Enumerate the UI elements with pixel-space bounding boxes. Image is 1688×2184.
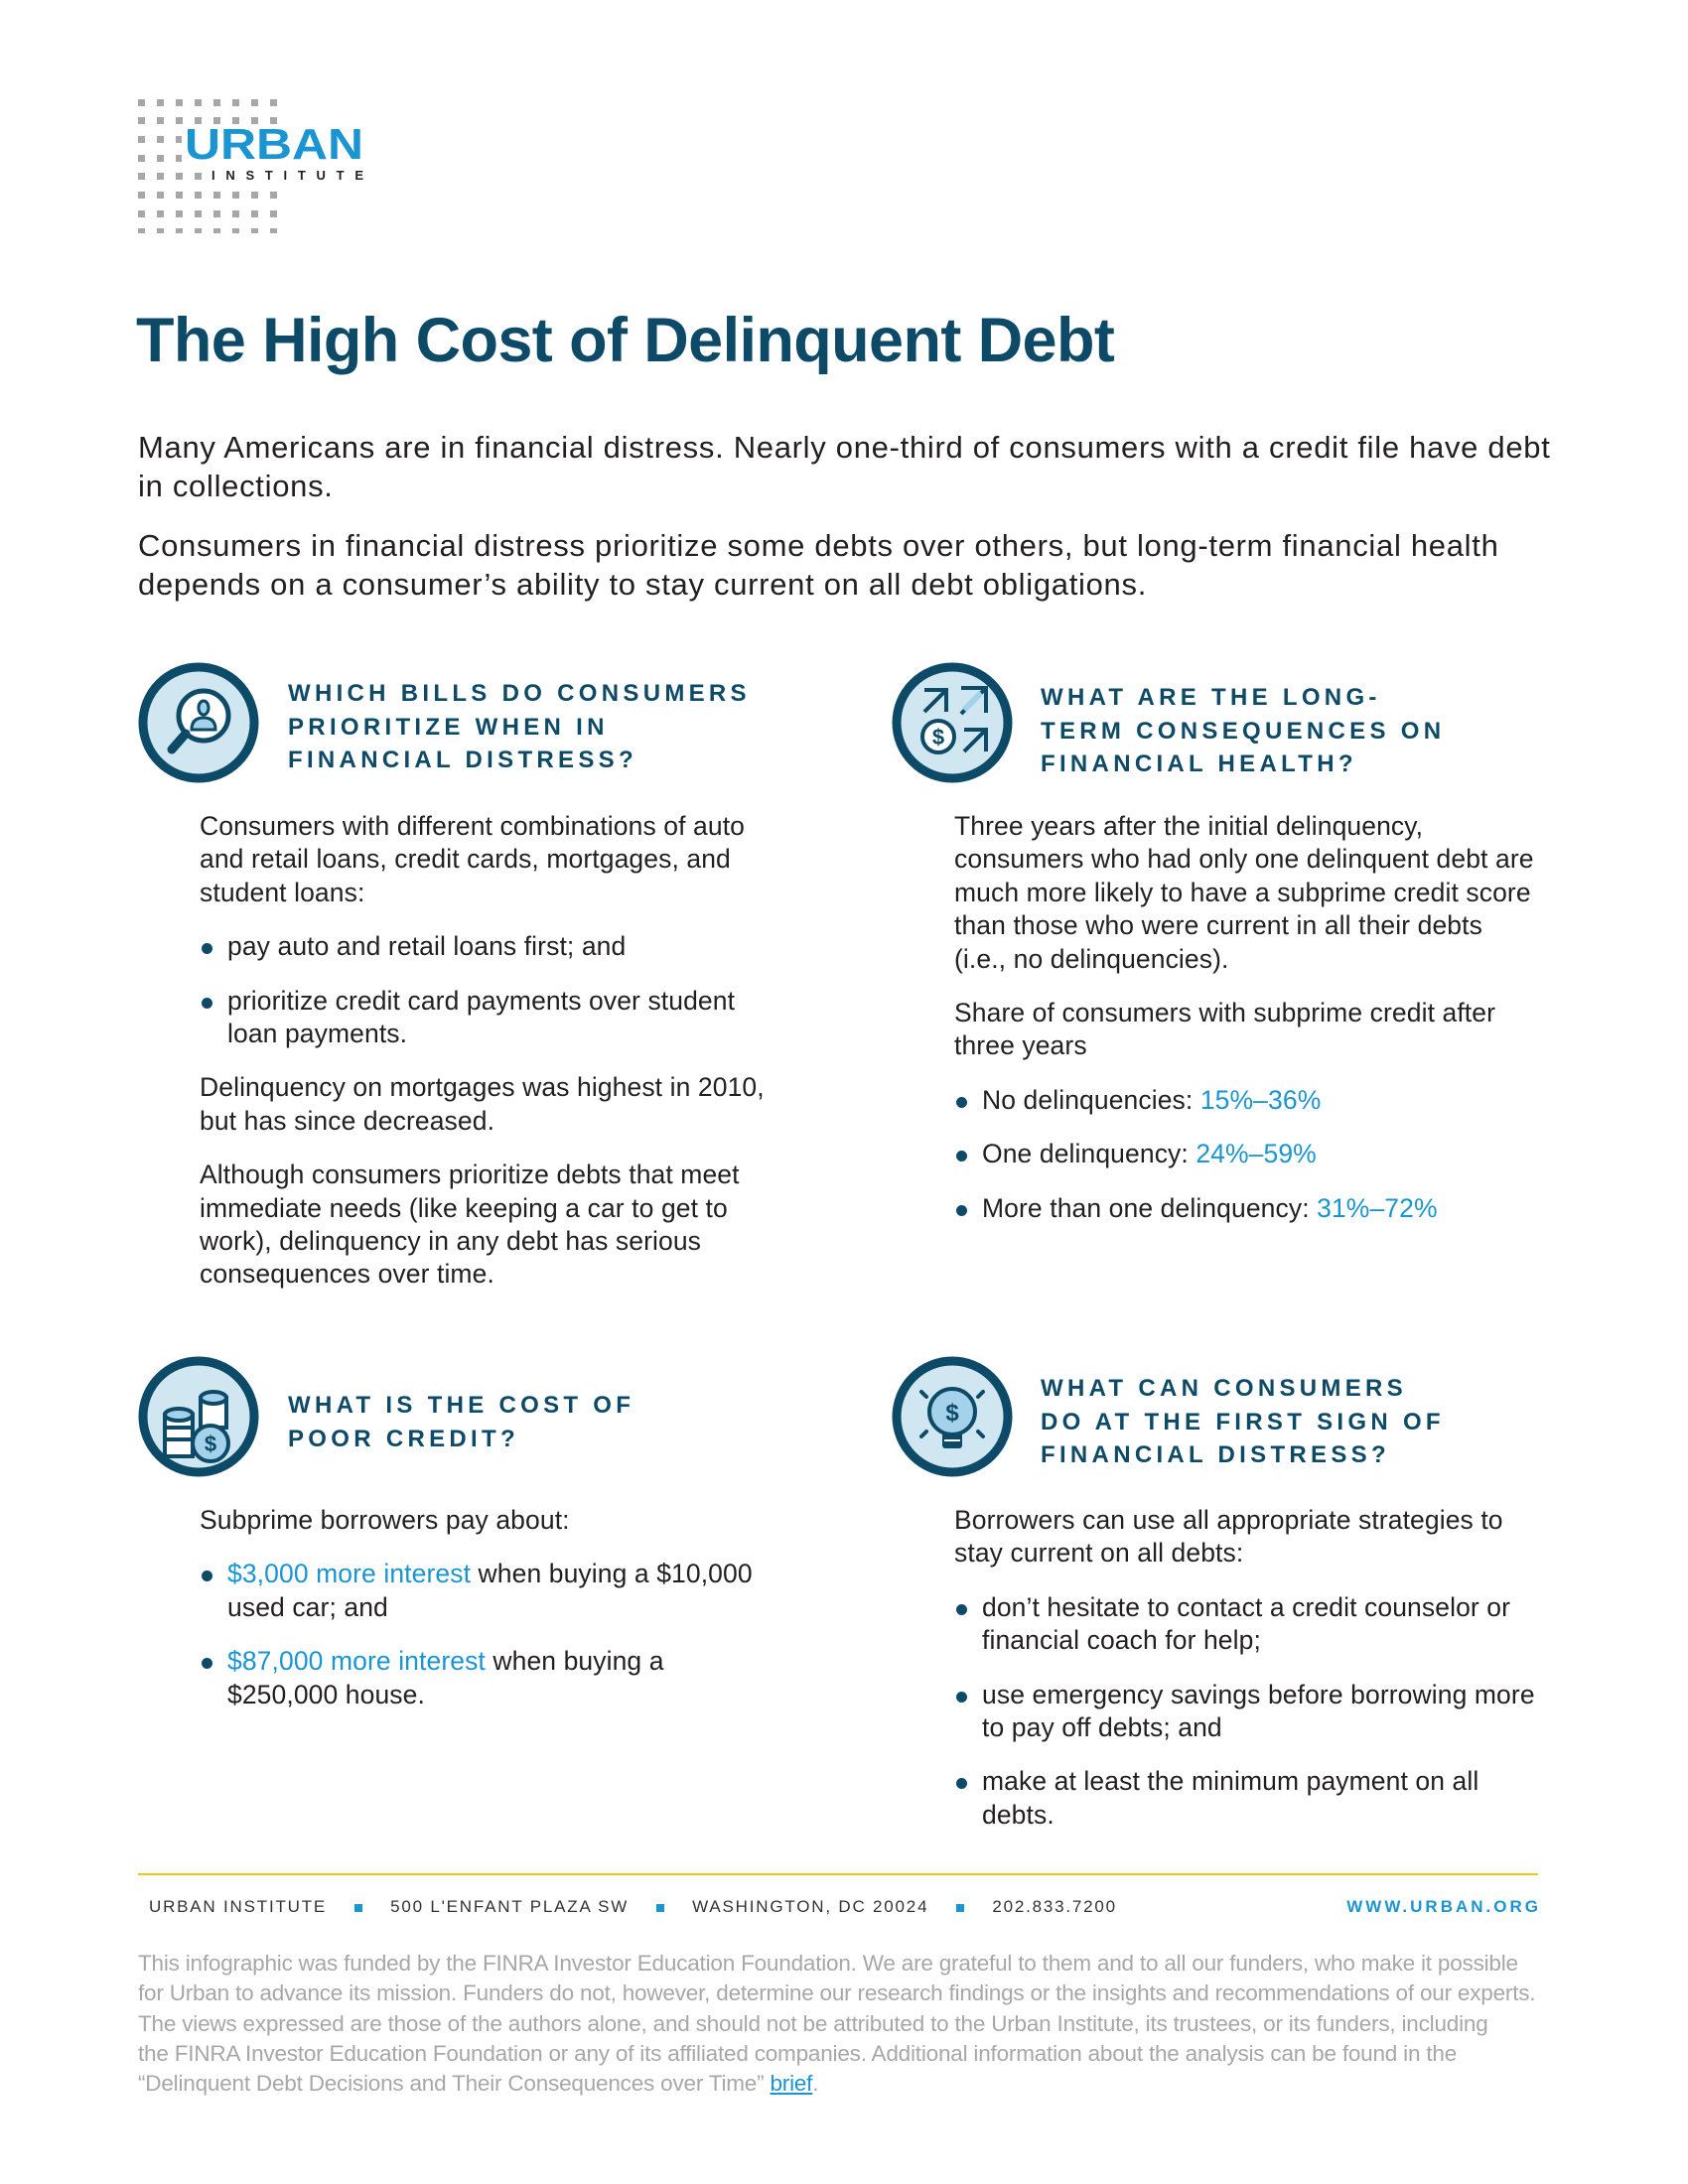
heading: long-term consequences: WHAT ARE THE LONG- <box>1041 684 1381 711</box>
text block: cost: used car; and <box>227 1592 388 1622</box>
heading: first sign of distress <box>1041 1375 1445 1468</box>
heading: cost of poor credit: POOR CREDIT? <box>288 1426 519 1451</box>
heading: first sign of distress: DO AT THE FIRST SIGN OF <box>1041 1408 1445 1435</box>
text block: cost: Subprime borrowers pay about: <box>200 1505 570 1535</box>
heading: long-term consequences: FINANCIAL HEALTH? <box>1041 751 1357 777</box>
heading: which bills: WHICH BILLS DO CONSUMERS <box>288 680 751 707</box>
intro text: in collections. Consumers in financial distress prioritize some debts over others, but long-term financial health <box>138 469 1499 563</box>
title: The High Cost of Delinquent Debt <box>136 306 1114 375</box>
icon: arrows dollar <box>892 663 1013 782</box>
text block: prioritize: consequences over time. <box>200 1259 494 1289</box>
heading: cost of poor credit: WHAT IS THE COST OF <box>288 1392 634 1419</box>
heading: which bills: PRIORITIZE WHEN IN <box>288 713 609 741</box>
heading: which bills <box>288 680 751 773</box>
text block: prioritize: immediate needs (like keeping a car to get to <box>200 1193 728 1223</box>
heading: which bills: FINANCIAL DISTRESS? <box>288 747 637 773</box>
disclaimer: for Urban to advance its mission. Funders do not, however, determine our research findings or the insights and recommendations of our experts. <box>138 1980 1535 2005</box>
text block: consequences: three years <box>954 1030 1087 1060</box>
text block: prioritize <box>200 811 765 1289</box>
text block: consequences: Share of consumers with subprime credit after <box>954 998 1495 1027</box>
text block: consequences: More than one delinquency: 31%–72% <box>982 1193 1438 1223</box>
icon: arrows dollar: $ <box>932 725 944 750</box>
footer address: WWW.URBAN.ORG <box>1346 1897 1541 1916</box>
text block: consequences: One delinquency: 24%–59% <box>982 1139 1317 1168</box>
heading: first sign of distress: FINANCIAL DISTRESS? <box>1041 1441 1390 1468</box>
text block: strategies: use emergency savings before borrowing more <box>982 1680 1535 1709</box>
text block: prioritize: pay auto and retail loans first; and <box>227 931 626 961</box>
logo: INSTITUTE <box>211 168 363 183</box>
icon: coins: $ <box>205 1432 216 1456</box>
logo: URBAN <box>185 120 363 169</box>
text block: consequences: much more likely to have a subprime credit score <box>954 878 1531 907</box>
disclaimer: “Delinquent Debt Decisions and Their Consequences over Time” brief. <box>138 2071 818 2096</box>
footer address <box>149 1897 1541 1916</box>
heading: long-term consequences <box>1041 684 1445 777</box>
text block: prioritize: work), delinquency in any debt has serious <box>200 1226 701 1256</box>
disclaimer: the FINRA Investor Education Foundation or any of its affiliated companies. Additional information about the analysis can be found in the <box>138 2041 1457 2066</box>
text block: prioritize: loan payments. <box>227 1019 407 1048</box>
text block: consequences: (i.e., no delinquencies). <box>954 944 1229 974</box>
intro text: Many Americans are in financial distress. Nearly one-third of consumers with a credit file have debt <box>138 430 1551 465</box>
intro text: depends on a consumer’s ability to stay current on all debt obligations. <box>138 567 1147 602</box>
text block: strategies: don’t hesitate to contact a credit counselor or <box>982 1592 1510 1622</box>
icon: coins <box>139 1356 258 1477</box>
disclaimer: The views expressed are those of the authors alone, and should not be attributed to the Urban Institute, its trustees, or its funders, including <box>138 2011 1488 2036</box>
heading: first sign of distress: WHAT CAN CONSUMERS <box>1041 1375 1407 1402</box>
text block: strategies: make at least the minimum payment on all <box>982 1766 1478 1796</box>
heading: cost of poor credit <box>288 1392 634 1451</box>
text block: prioritize: prioritize credit card payments over student <box>227 986 735 1016</box>
text block: cost <box>200 1505 753 1709</box>
text block: prioritize: Delinquency on mortgages was highest in 2010, <box>200 1072 765 1102</box>
text block: prioritize: Although consumers prioritize debts that meet <box>200 1160 740 1189</box>
disclaimer <box>138 1951 1535 2096</box>
text block: strategies <box>954 1505 1535 1830</box>
text block: strategies: stay current on all debts: <box>954 1538 1243 1568</box>
intro text <box>138 430 1551 602</box>
text block: consequences: No delinquencies: 15%–36% <box>982 1085 1321 1115</box>
text block: strategies: Borrowers can use all appropriate strategies to <box>954 1505 1503 1535</box>
icon: lightbulb: $ <box>945 1400 959 1427</box>
text block: strategies: financial coach for help; <box>982 1625 1261 1655</box>
heading: long-term consequences: TERM CONSEQUENCES ON <box>1041 717 1445 745</box>
disclaimer: This infographic was funded by the FINRA Investor Education Foundation. We are grateful to them and to all our funders, who make it possible <box>138 1951 1518 1976</box>
text block: cost: $3,000 more interest when buying a $10,000 <box>227 1559 753 1588</box>
text block: strategies: to pay off debts; and <box>982 1712 1222 1742</box>
text block: prioritize: but has since decreased. <box>200 1106 494 1136</box>
footer address: URBAN INSTITUTE 500 L'ENFANT PLAZA SW WASHINGTON, DC 20024 202.833.7200 <box>149 1897 1117 1916</box>
text block: prioritize: Consumers with different combinations of auto <box>200 811 745 841</box>
text block: consequences: than those who were current in all their debts <box>954 910 1482 940</box>
icon: lightbulb <box>892 1356 1013 1477</box>
text block: consequences: Three years after the initial delinquency, <box>954 811 1423 841</box>
icon: magnifier person <box>139 663 258 782</box>
text block: prioritize: student loans: <box>200 878 364 907</box>
text block: prioritize: and retail loans, credit cards, mortgages, and <box>200 844 731 874</box>
logo <box>138 99 363 233</box>
text block: cost: $87,000 more interest when buying a <box>227 1646 664 1676</box>
text block: consequences: consumers who had only one delinquent debt are <box>954 844 1534 874</box>
text block: consequences <box>954 811 1534 1223</box>
text block: cost: $250,000 house. <box>227 1680 425 1709</box>
text block: strategies: debts. <box>982 1800 1055 1830</box>
